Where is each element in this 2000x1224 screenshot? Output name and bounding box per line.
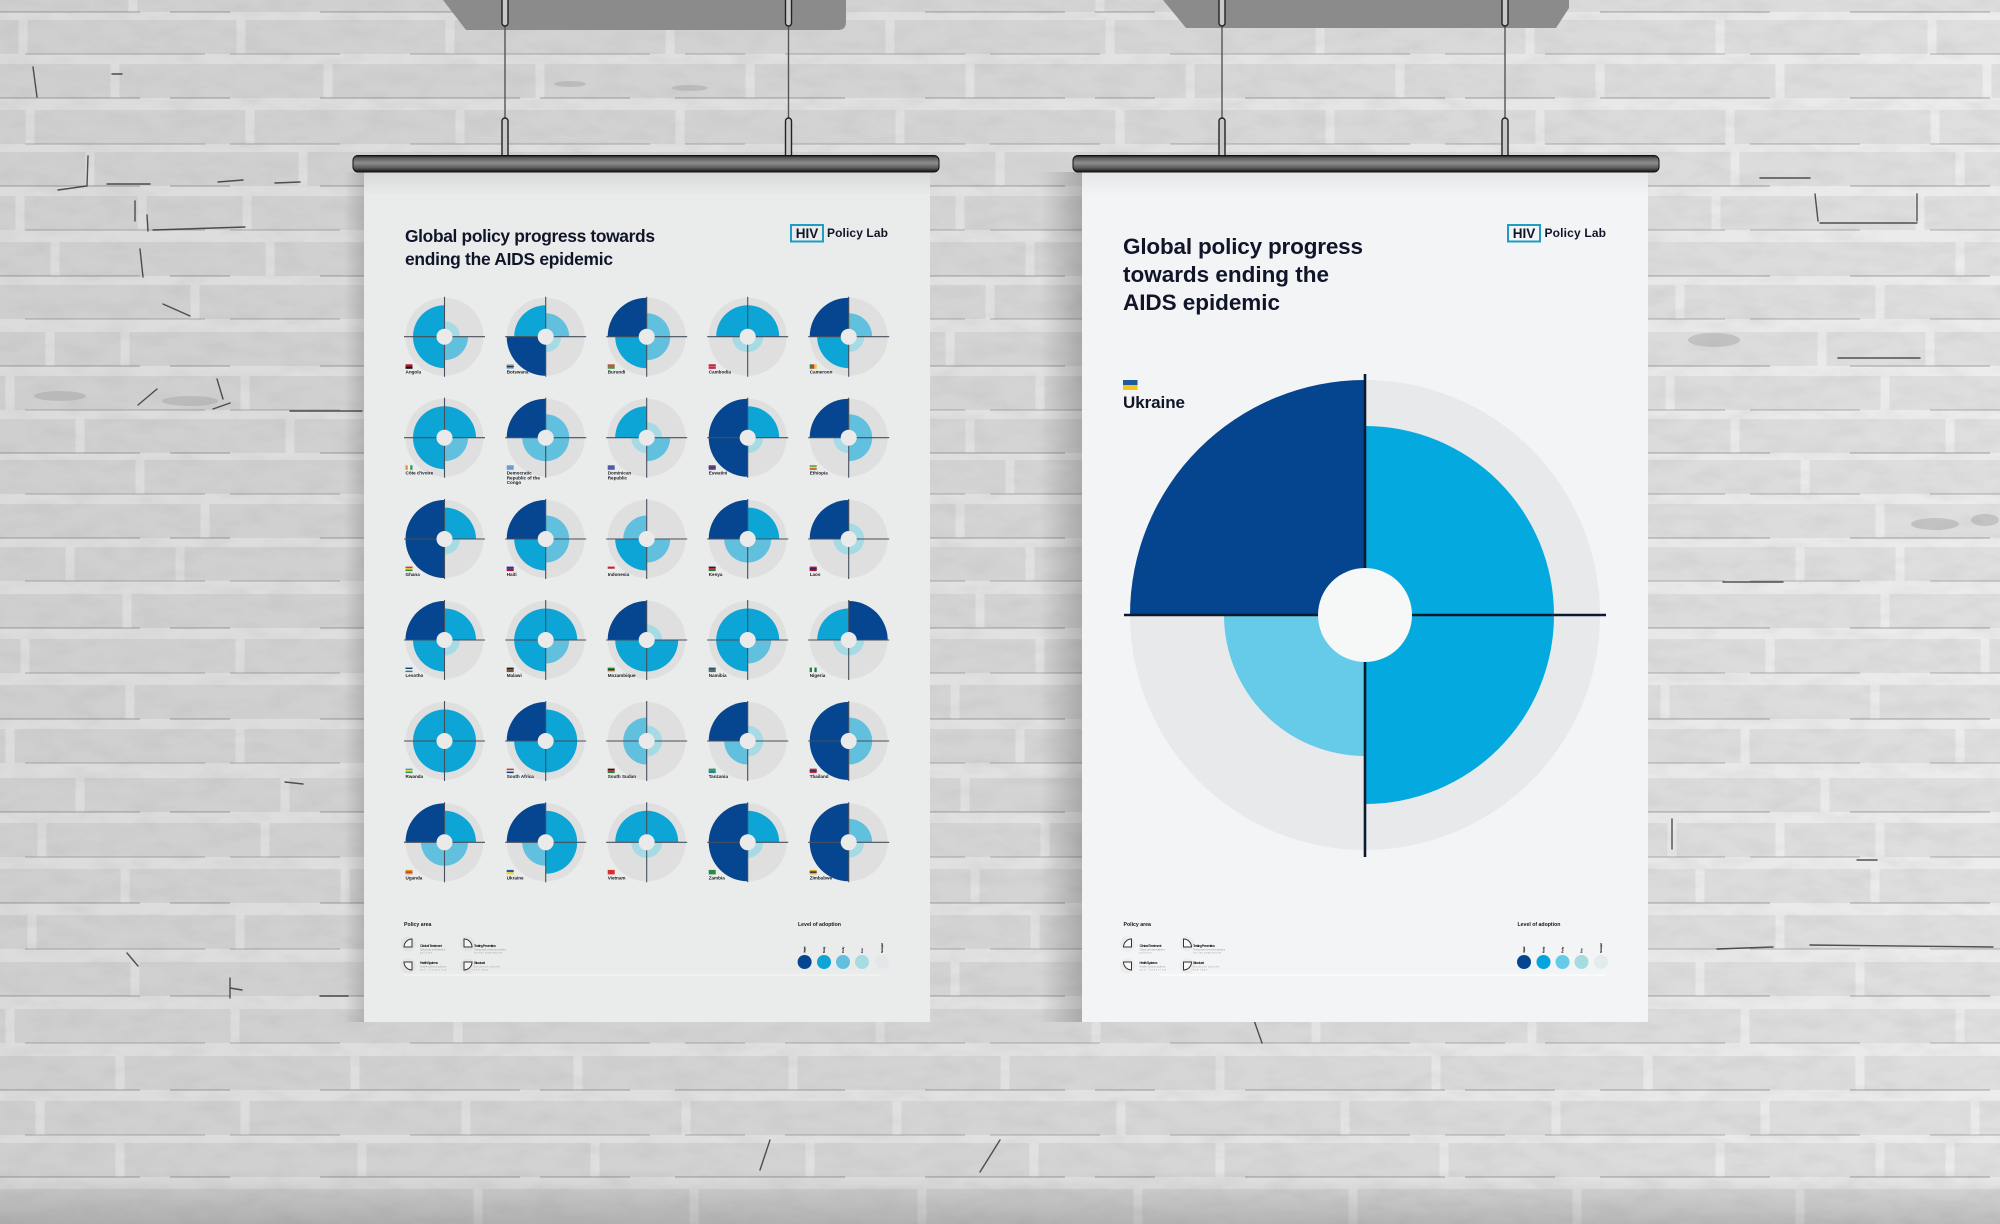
flag: Ukraine [1123,380,1138,390]
logo: HIV Policy Lab [1508,225,1606,242]
chart: Dominican Republic [606,398,687,480]
legend: level of adoption: Level of adoption [798,922,841,928]
legend: policy area: Policy area [1124,922,1151,928]
legend: policy area: Structural policies [474,966,501,968]
chart: Burundi [606,297,687,377]
chart: Nigeria: Nigeria [810,673,826,678]
chart: Angola [404,297,485,377]
chart: Laos: Laos [810,572,821,577]
logo: HIV Policy Lab: HIV [1513,226,1535,241]
chart: Ethiopia: Ethiopia [810,471,828,476]
chart: Cambodia: Cambodia [709,370,731,375]
title [1123,234,1363,315]
chart: Haiti [505,499,586,579]
chart: Nigeria [808,600,889,680]
legend: policy area: Testing and prevention policies [474,948,507,952]
chart: Vietnam: Vietnam [608,875,625,880]
title: Global policy progress [1123,234,1363,259]
chart: Cameroon: Cameroon [810,370,833,375]
logo: HIV Policy Lab [791,225,888,242]
legend: policy area: Clinical care and treatment [1140,948,1165,952]
chart: Uganda: Uganda [406,875,423,880]
legend: level of adoption: Partly [841,946,845,953]
logo: HIV Policy Lab: HIV [796,226,818,241]
chart: Botswana: Botswana [507,370,529,375]
legend: policy area: Structural policies [1193,966,1220,968]
chart: Cambodia [707,297,788,377]
title: AIDS epidemic [1123,290,1280,315]
legend: policy area: Structural [474,961,485,965]
chart: Lesotho: Lesotho [406,673,424,678]
legend: policy area [400,922,507,974]
title: Global policy progress towards [405,226,655,246]
chart: Burundi: Burundi [608,370,625,375]
legend: level of adoption: Adopted [803,946,807,953]
legend: level of adoption: Mostly [1542,946,1546,953]
chart: Malawi [505,600,586,680]
chart: South Sudan: South Sudan [608,774,636,779]
legend: policy area: for key populations [1193,952,1222,954]
chart: Democratic Republic of the Congo [505,398,586,485]
chart: Ghana: Ghana [406,572,420,577]
chart: Eswatini [707,398,788,478]
chart: Haiti: Haiti [507,572,517,577]
hanging rod right [1073,156,1659,172]
legend: level of adoption: Level of adoption [1518,922,1560,928]
legend: policy area: Testing and prevention policies [1193,948,1226,952]
legend: policy area: Policy area [404,922,432,928]
legend: level of adoption: Few [1580,947,1584,953]
legend: policy area: for key populations [474,952,503,954]
chart: Kenya [707,499,788,579]
chart: Laos [808,499,889,579]
legend: level of adoption: Not adopted [880,943,884,953]
title: towards ending the [1123,262,1329,287]
legend: policy area: policies [1140,952,1152,954]
legend: policy area: Health systems policies [1140,966,1166,968]
legend: policy area: Health systems policies [420,966,447,968]
chart: Ukraine [505,802,586,882]
chart: Democratic Republic of the Congo: Republic of the [507,475,540,480]
legend: policy area [1120,922,1226,974]
chart: Côte d'Ivoire: Côte d'Ivoire [406,471,434,476]
title: ending the AIDS epidemic [405,249,613,269]
label: Ukraine: Ukraine [1123,393,1185,412]
legend: policy area: Testing Prevention [474,944,496,948]
ceiling mount left [443,0,846,30]
hanging rod left [353,156,939,172]
chart: Zimbabwe [808,802,889,882]
legend: policy area: and financing [1140,970,1166,972]
chart: Lesotho [404,600,485,680]
chart: Indonesia: Indonesia [608,572,630,577]
legend: level of adoption: Not adopted [1599,943,1603,953]
chart: Eswatini: Eswatini [709,471,727,476]
legend: level of adoption [798,922,889,969]
chart: Botswana [505,297,586,377]
legend: policy area: Health Systems [1140,961,1158,965]
logo: HIV Policy Lab: Policy Lab [827,226,888,240]
title [405,226,655,269]
chart: Rwanda [404,701,485,781]
chart: Cameroon [808,297,889,377]
chart: Angola: Angola [406,370,422,375]
big chart: Ukraine [1124,374,1606,857]
logo: HIV Policy Lab: Policy Lab [1544,226,1606,240]
legend: policy area: and financing [420,970,447,972]
chart: Zambia: Zambia [709,875,725,880]
chart: Democratic Republic of the Congo: Democratic [507,471,532,476]
legend: policy area: Clinical care and treatment [420,948,445,952]
chart: Thailand: Thailand [810,774,829,779]
legend: policy area: policies [420,952,433,954]
legend: level of adoption: Adopted [1522,946,1526,953]
chart: Zimbabwe: Zimbabwe [810,875,833,880]
chart: Rwanda: Rwanda [406,774,424,779]
chart: Malawi: Malawi [507,673,522,678]
chart: Ethiopia [808,398,889,478]
legend: level of adoption [1517,922,1608,969]
chart: South Africa [505,701,586,781]
chart: Namibia: Namibia [709,673,727,678]
legend: level of adoption: Mostly [822,946,826,953]
legend: policy area: and laws [474,970,489,972]
chart: Dominican Republic: Republic [608,475,628,480]
chart: Ukraine: Ukraine [507,875,524,880]
legend: policy area: Health Systems [420,961,438,965]
chart: Mozambique [606,600,687,680]
legend: policy area: Testing Prevention [1193,944,1215,948]
legend: policy area: Structural [1193,961,1204,965]
chart: Indonesia [606,499,687,579]
chart: Kenya: Kenya [709,572,723,577]
chart: Thailand [808,701,889,781]
ceiling mount right [1163,0,1569,28]
legend: level of adoption: Partly [1560,946,1564,953]
chart: South Africa: South Africa [507,774,534,779]
chart: Côte d'Ivoire [404,398,485,478]
chart: Zambia [707,802,788,882]
chart: Namibia [707,600,788,680]
legend: policy area: and laws [1193,970,1208,972]
chart: Tanzania: Tanzania [709,774,728,779]
chart: Uganda [404,802,485,882]
hanging cables and clips [502,0,1508,158]
legend: policy area: Clinical Treatment [420,944,443,948]
legend: level of adoption: Few [860,947,864,953]
chart: Tanzania [707,701,788,781]
poster: global grid of countries [364,172,930,1022]
chart: Vietnam [606,802,687,882]
chart: Democratic Republic of the Congo: Congo [507,480,521,485]
poster: Ukraine [1082,172,1648,1022]
chart: Dominican Republic: Dominican [608,471,631,476]
chart: South Sudan [606,701,687,781]
chart: Mozambique: Mozambique [608,673,636,678]
legend: policy area: Clinical Treatment [1140,944,1162,948]
chart: Ghana [404,499,485,579]
